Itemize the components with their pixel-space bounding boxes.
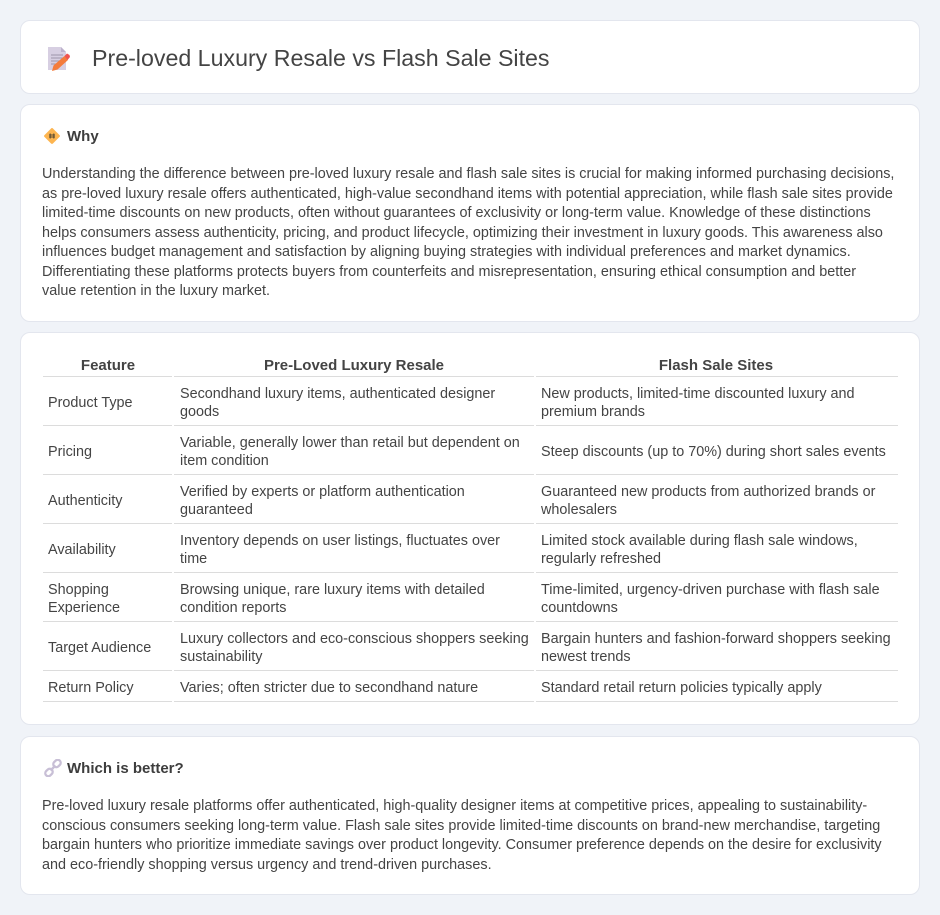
row: shopping experience: condition reports xyxy=(180,600,286,616)
row: availability: regularly refreshed xyxy=(541,551,661,567)
panel: which is better xyxy=(20,736,920,895)
row: product type: Product Type xyxy=(48,395,133,411)
why text: Differentiating these platforms protects buyers from counterfeits and misrepresentation, ensuring ethical consumption and better xyxy=(42,264,856,280)
row: shopping experience: Time-limited, urgency-driven purchase with flash sale xyxy=(541,582,880,598)
table header: pre-loved luxury resale: Pre-Loved Luxury Resale xyxy=(264,357,444,374)
row: target audience: Luxury collectors and eco-conscious shoppers seeking xyxy=(180,631,529,647)
heading: why: Why xyxy=(67,128,99,145)
title: Pre-loved Luxury Resale vs Flash Sale Sites xyxy=(92,45,550,71)
row: target audience: sustainability xyxy=(180,649,262,665)
row: authenticity: Guaranteed new products from authorized brands or xyxy=(541,484,875,500)
row: product type xyxy=(48,386,855,420)
why text: Understanding the difference between pre-loved luxury resale and flash sale sites is crucial for making informed purchasing decisions, xyxy=(42,166,894,182)
row: authenticity xyxy=(48,484,876,518)
row: product type: Secondhand luxury items, authenticated designer xyxy=(180,386,495,402)
row: authenticity: wholesalers xyxy=(541,502,617,518)
heading: which is better: Which is better? xyxy=(67,760,184,777)
why text: limited-time discounts on new products, often without guarantees of exclusivity or long-term value. Knowledge of these distinctions xyxy=(42,205,871,221)
row: return policy: Standard retail return policies typically apply xyxy=(541,680,822,696)
which text: and eco-friendly shopping versus urgency and trend-driven purchases. xyxy=(42,857,492,873)
row: authenticity: Authenticity xyxy=(48,493,122,509)
why text: as pre-loved luxury resale offers authenticated, high-value secondhand items with potential appreciation, while flash sale sites provide xyxy=(42,186,893,202)
row: target audience xyxy=(48,631,891,665)
row: target audience: Bargain hunters and fashion-forward shoppers seeking xyxy=(541,631,891,647)
why text: value retention in the luxury market. xyxy=(42,283,270,299)
row: availability xyxy=(48,533,858,567)
which text xyxy=(42,798,882,873)
row: shopping experience: Experience xyxy=(48,600,120,616)
why text: influences budget management and satisfaction by aligning buying strategies with individual preferences and market dynamics. xyxy=(42,244,851,260)
which text: bargain hunters who prioritize immediate savings over product longevity. Consumer preference depends on the desire for exclusivity xyxy=(42,837,882,853)
row: authenticity: Verified by experts or platform authentication xyxy=(180,484,465,500)
row: product type: premium brands xyxy=(541,404,645,420)
row: availability: Limited stock available during flash sale windows, xyxy=(541,533,858,549)
row: product type: New products, limited-time discounted luxury and xyxy=(541,386,855,402)
row: target audience: Target Audience xyxy=(48,640,151,656)
row: pricing: Pricing xyxy=(48,444,92,460)
row: target audience: newest trends xyxy=(541,649,631,665)
row: availability: Inventory depends on user listings, fluctuates over xyxy=(180,533,500,549)
table header: feature: Feature xyxy=(81,357,135,374)
panel: why xyxy=(20,104,920,322)
row: pricing: Steep discounts (up to 70%) during short sales events xyxy=(541,444,886,460)
why text: helps consumers assess authenticity, pricing, and product lifecycle, optimizing their investment in luxury goods. This awareness also xyxy=(42,225,883,241)
which text: conscious consumers seeking long-term value. Flash sale sites provide limited-time discounts on brand-new merchandise, targeting xyxy=(42,818,880,834)
icon: diamond xyxy=(44,128,60,144)
why text xyxy=(42,166,894,299)
row: shopping experience: Browsing unique, rare luxury items with detailed xyxy=(180,582,485,598)
row: authenticity: guaranteed xyxy=(180,502,253,518)
row: pricing xyxy=(48,435,886,469)
row: shopping experience xyxy=(48,582,880,616)
panel: header xyxy=(20,20,920,94)
icon: memo with pencil xyxy=(48,47,70,71)
row: return policy xyxy=(48,680,822,696)
row: pricing: item condition xyxy=(180,453,269,469)
row: shopping experience: Shopping xyxy=(48,582,109,598)
row: product type: goods xyxy=(180,404,219,420)
table header: flash sale sites: Flash Sale Sites xyxy=(659,357,773,374)
row: pricing: Variable, generally lower than retail but dependent on xyxy=(180,435,520,451)
panel: comparison table xyxy=(20,332,920,725)
icon: link xyxy=(44,759,62,777)
row: shopping experience: countdowns xyxy=(541,600,618,616)
row: availability: time xyxy=(180,551,207,567)
row: return policy: Varies; often stricter due to secondhand nature xyxy=(180,680,478,696)
row: availability: Availability xyxy=(48,542,116,558)
which text: Pre-loved luxury resale platforms offer authenticated, high-quality designer items at competitive prices, appealing to sustainability- xyxy=(42,798,867,814)
row: return policy: Return Policy xyxy=(48,680,134,696)
